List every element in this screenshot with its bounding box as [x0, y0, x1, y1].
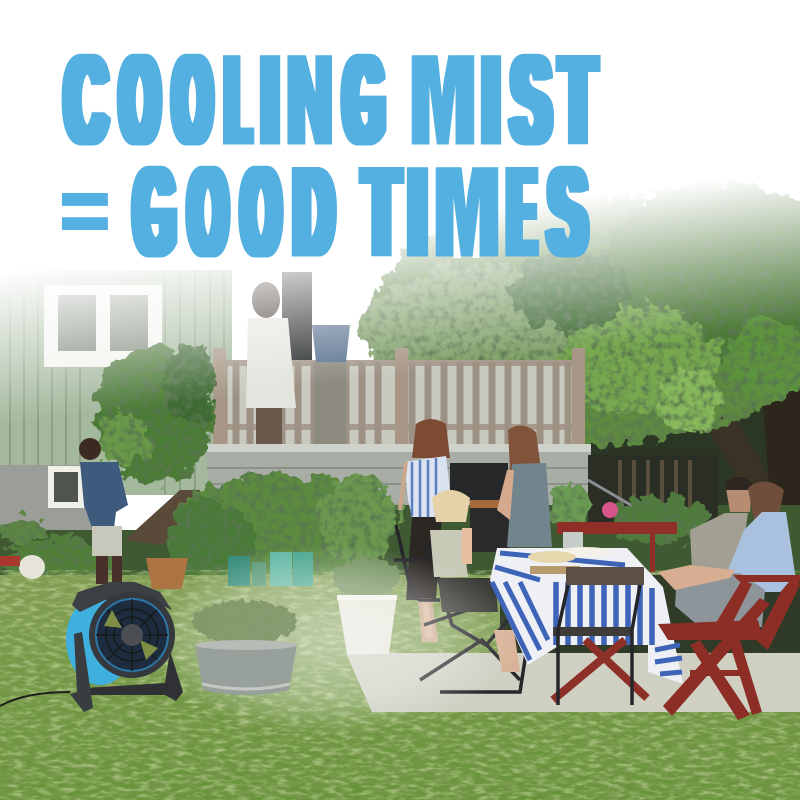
photo: stone patio	[346, 653, 800, 712]
mist overlay: haze from fan	[140, 545, 520, 735]
title line 2: D	[294, 143, 333, 282]
title line 1: G	[344, 31, 384, 170]
title line 1: O	[174, 31, 211, 170]
fan: front leg	[70, 632, 93, 712]
photo: tree trunk	[690, 360, 800, 640]
title line 1: I	[262, 31, 278, 170]
fan: front guard	[89, 592, 175, 678]
photo: boy	[79, 438, 128, 584]
photo: bush beside house	[95, 345, 216, 483]
photo: dark garden backdrop	[580, 380, 800, 640]
photo: woman in striped shirt	[400, 419, 450, 640]
photo: people on deck	[246, 282, 350, 446]
fan: power cable	[0, 692, 70, 706]
title line 1: C	[65, 31, 107, 170]
photo: red table legs	[553, 640, 647, 700]
galvanized tub planter	[193, 600, 297, 695]
photo: woman in floral dress	[497, 425, 552, 547]
photo: deck base	[207, 444, 591, 508]
title line 2: O	[189, 143, 227, 282]
title	[65, 31, 595, 282]
photo: house wall	[0, 270, 312, 535]
photo: planting bed backing	[0, 505, 800, 590]
photo: deck railing	[213, 348, 585, 446]
photo: shade behind dining table	[500, 575, 800, 655]
title line 2: T	[364, 143, 399, 282]
photo: man in blue shirt	[658, 481, 796, 627]
photo: striped tablecloth	[490, 532, 683, 684]
photo: garden shrubs	[0, 474, 710, 591]
title line 2: G	[134, 143, 175, 282]
photo: lawn	[0, 575, 800, 800]
title line 2: O	[242, 143, 280, 282]
title line 2: E	[509, 143, 535, 282]
photo: grill	[450, 463, 510, 552]
mist overlay: top fade	[0, 0, 800, 440]
title line 2: I	[408, 143, 426, 282]
photo: red wooden chair	[658, 575, 800, 720]
photo: front chair	[553, 567, 644, 705]
infographic canvas: T	[561, 31, 595, 170]
fan: blue body	[66, 595, 134, 685]
photo: watering cans	[228, 552, 313, 586]
title line 1: L	[226, 31, 250, 170]
title line 1: I	[483, 31, 499, 170]
photo: man in grey shirt	[690, 476, 752, 570]
title line 1: M	[413, 31, 473, 170]
title: S	[549, 143, 586, 282]
title line 1: N	[290, 31, 330, 170]
icon: misting fan	[66, 582, 183, 712]
fan: handle	[72, 582, 172, 612]
photo: red side table	[557, 502, 677, 572]
title line 2: =	[65, 162, 105, 262]
photo: left dark chairs	[394, 525, 528, 692]
photo: girl	[430, 490, 520, 672]
photo: small pots	[0, 555, 188, 589]
fan: base and rear leg	[85, 651, 183, 701]
photo: white planter with flowers	[334, 558, 400, 654]
title line 1: O	[121, 31, 159, 170]
photo: wooden steps	[125, 490, 200, 545]
title line 2: M	[437, 143, 497, 282]
photo: dark fence	[588, 455, 718, 525]
title letter counters for M and N	[305, 53, 480, 258]
photo: tree canopy	[360, 180, 800, 445]
title line 1: S	[512, 31, 550, 170]
